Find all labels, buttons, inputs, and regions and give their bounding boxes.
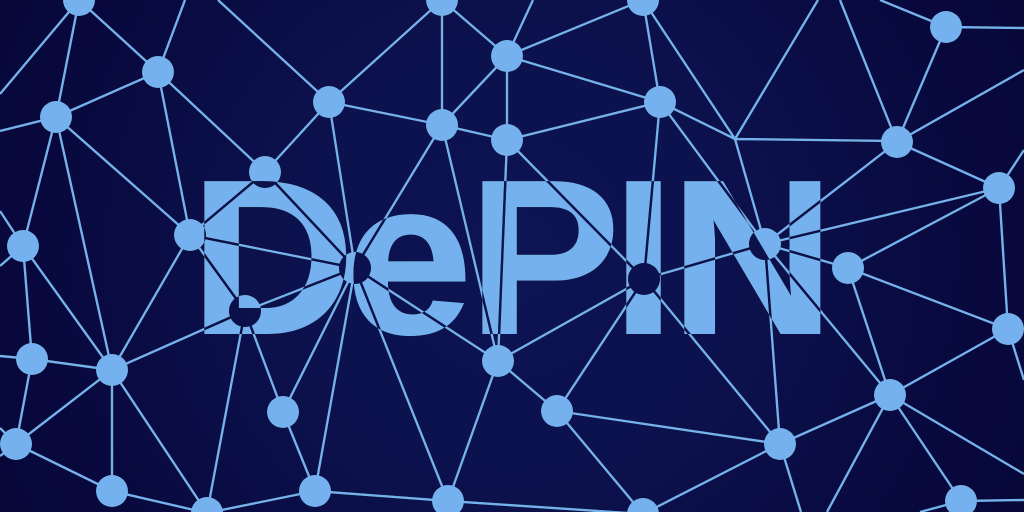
title: DePIN: DePIN: [190, 134, 835, 380]
